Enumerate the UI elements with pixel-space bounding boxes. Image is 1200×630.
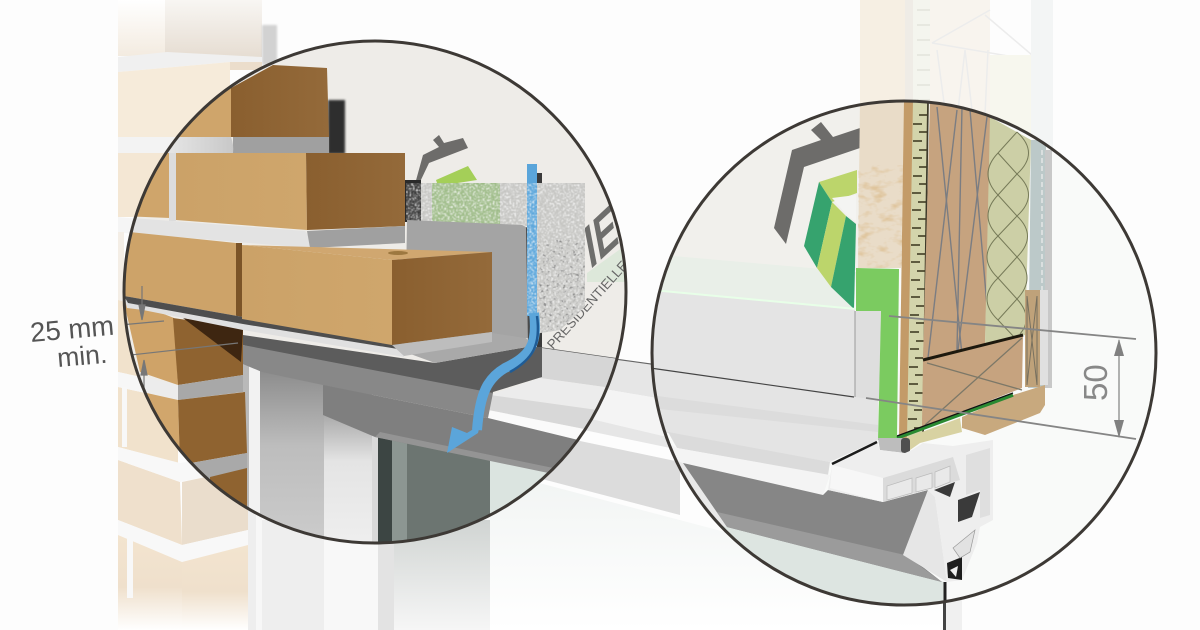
dimension guide lines <box>866 316 1136 439</box>
flashing corner <box>855 311 881 400</box>
head flashing nose <box>238 345 493 418</box>
faded window below right circle <box>943 598 962 630</box>
wood stud cavity <box>923 100 992 360</box>
main brick <box>242 245 492 345</box>
upper green-tint flashing <box>662 270 856 308</box>
dimension arrow: 50 <box>1114 339 1124 438</box>
head grey band <box>323 385 576 468</box>
PVC sill and frame <box>828 440 993 582</box>
wall backing <box>673 106 860 270</box>
faded background scene <box>118 0 1053 630</box>
faded sill band between circles <box>480 348 680 515</box>
small stud <box>1025 290 1048 387</box>
logo green bands <box>804 170 857 309</box>
wall wrap logo <box>415 135 626 282</box>
dimension text: 50: 50 <box>1077 364 1114 401</box>
base plate underlay <box>897 385 1045 450</box>
third row left brick <box>120 231 242 319</box>
top mortar joint <box>168 137 329 153</box>
mortar under main brick <box>392 332 492 356</box>
sill drip edge <box>715 454 828 475</box>
mineral wool insulation <box>985 117 1031 345</box>
drainage mesh <box>405 183 586 338</box>
text: min.: min. <box>56 339 108 373</box>
glass below soffit <box>723 526 944 604</box>
bottom plate <box>922 335 1023 427</box>
steel lintel under bricks <box>124 296 404 357</box>
white flashing panel <box>650 290 855 397</box>
faded wall section above right circle <box>860 0 1053 175</box>
steel angle vertical leg <box>406 220 530 340</box>
OSB sheathing <box>858 100 905 268</box>
shim <box>878 438 910 453</box>
circle outline right <box>652 101 1156 605</box>
circle outline left <box>124 41 626 543</box>
green membrane <box>856 268 899 440</box>
faded glass between circles <box>490 470 945 630</box>
window glass <box>378 438 546 542</box>
sheathing edge <box>899 100 914 438</box>
blue drainage arrow <box>447 313 538 453</box>
dimension arrows and lines in brick <box>128 286 238 388</box>
dark shadows behind bricks <box>328 100 542 353</box>
lower wall line <box>542 347 616 358</box>
right service layer <box>1028 140 1052 388</box>
text: logo letters: IE <box>580 190 622 282</box>
flashing lower fold <box>650 368 878 462</box>
logo chevron grey <box>774 122 860 244</box>
second mortar joint <box>133 218 405 248</box>
head flashing upper dark face <box>243 335 542 393</box>
sill faces right of head <box>488 348 616 440</box>
faded window frame below head <box>248 500 490 630</box>
PVC triangle return <box>903 490 947 582</box>
blue drainage strip <box>527 164 537 316</box>
second row brick <box>120 153 405 230</box>
text: wall wrap slogan: PRÉSIDENTIELLE <box>544 258 631 352</box>
sill faded bottom line <box>944 582 946 606</box>
foam comb layer <box>907 100 929 438</box>
text: 25 mm: 25 mm <box>29 310 115 348</box>
top brick <box>170 62 329 137</box>
flashing fold band <box>668 432 830 475</box>
faded brick wall <box>118 0 277 630</box>
detail circle: brick lintel drainage <box>118 41 640 570</box>
callout: 25 mm minimum <box>29 310 115 373</box>
detail circle: sill section <box>650 100 1156 612</box>
grey soffit <box>683 463 942 582</box>
brick row lower left <box>120 298 247 510</box>
window left jamb and frame <box>243 364 378 542</box>
steel angle horizontal leg <box>404 338 528 363</box>
